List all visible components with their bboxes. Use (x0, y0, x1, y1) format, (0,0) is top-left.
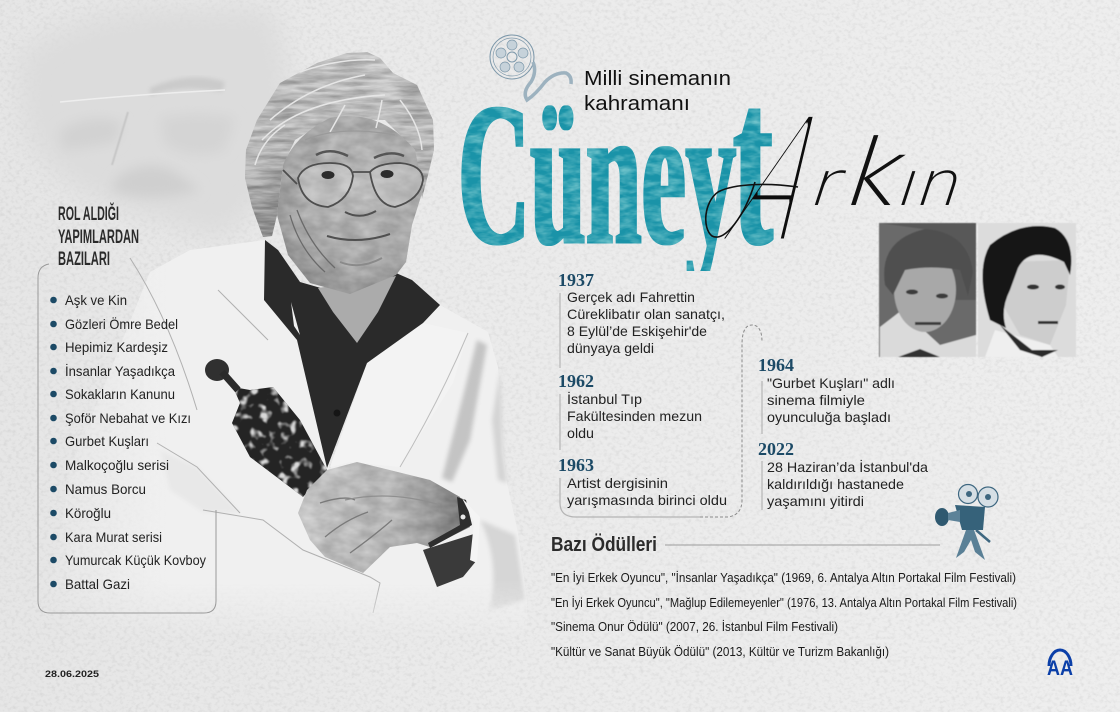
collar highlight and button (291, 302, 340, 416)
dark sleeve interior (423, 533, 477, 587)
hair strands (255, 60, 422, 165)
title: Cüneyt: t (733, 30, 773, 295)
1963: Artist dergisinin (567, 475, 668, 491)
fingers (320, 496, 440, 553)
heading: roles list title: ROL ALDIĞI (58, 203, 119, 225)
main photo: man with award (92, 52, 526, 616)
2022: yaşamını yitirdi (767, 493, 864, 509)
film names: Şoför Nebahat ve Kızı (65, 410, 191, 426)
subtitle: kahramanı (584, 93, 690, 115)
1937: 1937 (558, 270, 594, 290)
timeline rail (560, 293, 700, 517)
arrow: dashed timeline connector (700, 325, 762, 517)
1937 (558, 270, 725, 356)
heading: roles list title (58, 203, 139, 270)
1964: sinema filmiyle (767, 392, 865, 408)
icon: film camera (935, 484, 998, 560)
title: Arkın signature (699, 81, 983, 281)
film names: Malkoçoğlu serisi (65, 457, 169, 473)
2022: kaldırıldığı hastanede (767, 476, 904, 492)
background: ghost portrait (18, 8, 291, 240)
film items (50, 297, 57, 587)
2022: 2022 (758, 439, 794, 459)
photo: young portrait two (978, 223, 1076, 357)
1962 (558, 371, 702, 441)
jacket lapel (330, 384, 360, 467)
nose and smile (327, 211, 390, 265)
film names: Gurbet Kuşları (65, 433, 149, 449)
1937: 8 Eylül’de Eskişehir'de (567, 323, 707, 339)
title: Cüneyt: Cüney (458, 61, 736, 288)
1963: 1963 (558, 455, 594, 475)
logo: AA: AA (1047, 657, 1073, 680)
photo: young portrait one (879, 223, 976, 357)
awards list: "Sinema Onur Ödülü" (2007, 26. İstanbul Film Festivali) (551, 620, 838, 634)
face creases (290, 131, 404, 272)
subtitle: Milli sinemanın (584, 68, 731, 90)
1962: İstanbul Tıp (567, 390, 642, 407)
icon: film reel (490, 35, 571, 100)
awards heading: Bazı Ödülleri (551, 533, 657, 556)
jacket and sleeves (92, 241, 526, 616)
1963 (558, 455, 727, 508)
film names: Hepimiz Kardeşiz (65, 339, 168, 355)
1937: Gerçek adı Fahrettin (567, 289, 695, 305)
film names (65, 292, 206, 592)
heading: roles list title: BAZILARI (58, 249, 110, 270)
jacket creases (130, 258, 468, 613)
1964: 1964 (758, 355, 794, 375)
film names: Namus Borcu (65, 481, 146, 497)
hand (298, 462, 470, 573)
watch strap and cuff (428, 497, 480, 563)
panel: films list (38, 264, 216, 613)
1937: Cüreklibatır olan sanatçı, (567, 306, 725, 322)
timeline: right column (758, 355, 928, 510)
signature letter A: A (699, 81, 862, 281)
signature swash (706, 182, 798, 237)
film names: Gözleri Ömre Bedel (65, 315, 178, 332)
film names: Yumurcak Küçük Kovboy (65, 552, 206, 568)
eyes (322, 170, 394, 179)
awards list: "En İyi Erkek Oyuncu", "İnsanlar Yaşadıkça" (1969, 6. Antalya Altın Portakal Film Festivali) (551, 571, 1016, 585)
hair (245, 52, 434, 237)
1962: oldu (567, 425, 594, 441)
awards list: "Kültür ve Sanat Büyük Ödülü" (2013, Kültür ve Turizm Bakanlığı) (551, 645, 889, 659)
1964 (758, 355, 895, 425)
film names: Sokakların Kanunu (65, 386, 175, 402)
awards list: "En İyi Erkek Oyuncu", "Mağlup Edilemeyenler" (1976, 13. Antalya Altın Portakal Film Festivali) (551, 596, 1017, 610)
1963: yarışmasında birinci oldu (567, 492, 727, 508)
film names: Kara Murat serisi (65, 529, 162, 545)
signature letters rkın: rkın (800, 120, 983, 227)
awards list (551, 571, 1017, 659)
1964: "Gurbet Kuşları" adlı (767, 375, 895, 391)
logo: AA (1047, 650, 1073, 680)
neck (318, 276, 396, 343)
1937: dünyaya geldi (567, 340, 654, 356)
1964: oyunculuğa başladı (767, 409, 891, 425)
film names: Aşk ve Kin (65, 292, 127, 308)
subtitle (584, 68, 731, 115)
2022: 28 Haziran’da İstanbul'da (767, 458, 928, 475)
title: Cüneyt (461, 105, 774, 271)
timeline: left column (558, 270, 727, 517)
1962: Fakültesinden mezun (567, 408, 702, 424)
statuette (205, 359, 327, 497)
1962: 1962 (558, 371, 594, 391)
heading: roles list title: YAPIMLARDAN (58, 227, 139, 248)
face (277, 116, 423, 294)
film names: Battal Gazi (65, 576, 130, 592)
2022 (758, 439, 928, 509)
timeline rail (761, 381, 763, 510)
date: 28.06.2025 (45, 669, 100, 680)
panel: awards (551, 533, 1017, 659)
jacket shading (160, 340, 525, 610)
dark shirt (264, 240, 440, 468)
film names: İnsanlar Yaşadıkça (65, 362, 175, 379)
glasses (283, 163, 423, 207)
film names: Köroğlu (65, 505, 111, 521)
